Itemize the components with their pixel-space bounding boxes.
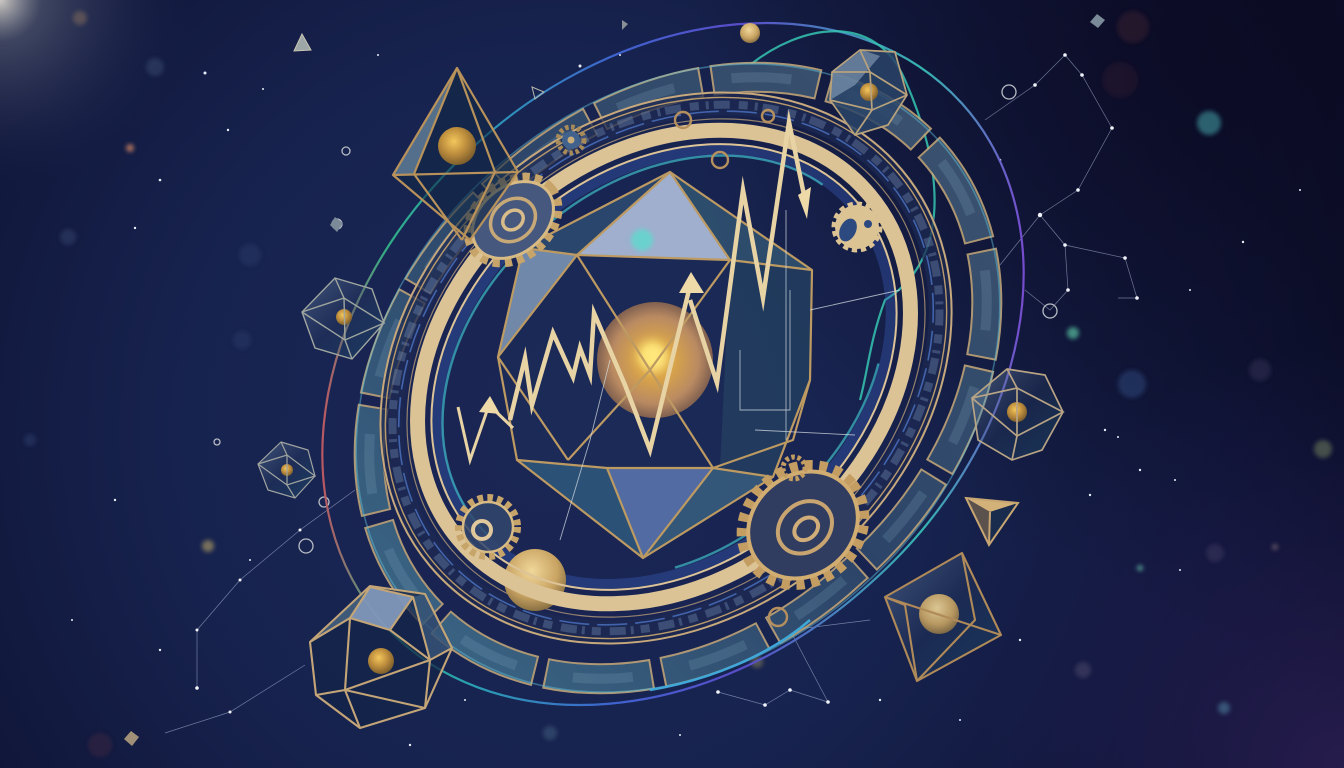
glowing core sphere bbox=[597, 302, 713, 418]
polyhedron: left lower bbox=[258, 442, 315, 498]
gold sphere: lower bbox=[504, 549, 566, 611]
gear: small top bbox=[558, 127, 584, 153]
circuit band between rings bbox=[380, 92, 952, 644]
orbit line: teal upper right bbox=[750, 31, 935, 400]
polyhedron: right bbox=[972, 369, 1063, 460]
tiny crystals bbox=[124, 14, 1105, 746]
small hollow rings bbox=[214, 85, 1057, 553]
central polyhedron bbox=[498, 172, 900, 558]
gear: small mid-bottom bbox=[783, 457, 805, 479]
small tetrahedron: right bbox=[966, 498, 1018, 545]
diamond with sphere: lower right bbox=[885, 553, 1001, 681]
polyhedron: top right bbox=[830, 50, 907, 135]
small ring links bbox=[675, 110, 787, 626]
polyhedron: large bottom left bbox=[310, 586, 452, 728]
gold ring bbox=[418, 130, 910, 604]
gold sphere: top bbox=[740, 23, 760, 43]
inner blue glass band bbox=[437, 150, 891, 584]
gear: lower left bbox=[459, 498, 517, 556]
polyhedron: left upper bbox=[302, 278, 384, 359]
gear: lower right bbox=[719, 442, 887, 608]
rising zigzag chart line with arrows bbox=[458, 122, 804, 460]
constellation stars bbox=[195, 53, 1139, 713]
segmented outer glass ring bbox=[356, 64, 1000, 692]
teal glint bbox=[631, 229, 653, 251]
upper light facets bbox=[498, 172, 812, 558]
chart arrowheads bbox=[479, 187, 811, 414]
constellation lines bbox=[165, 55, 1137, 733]
gear: upper right bbox=[835, 205, 879, 249]
bright blue edge: lower right bbox=[650, 620, 810, 690]
tetrahedron with sphere: top left bbox=[393, 68, 518, 240]
gear: upper left bbox=[452, 160, 574, 280]
orbit line: large tilted bbox=[322, 23, 1024, 705]
